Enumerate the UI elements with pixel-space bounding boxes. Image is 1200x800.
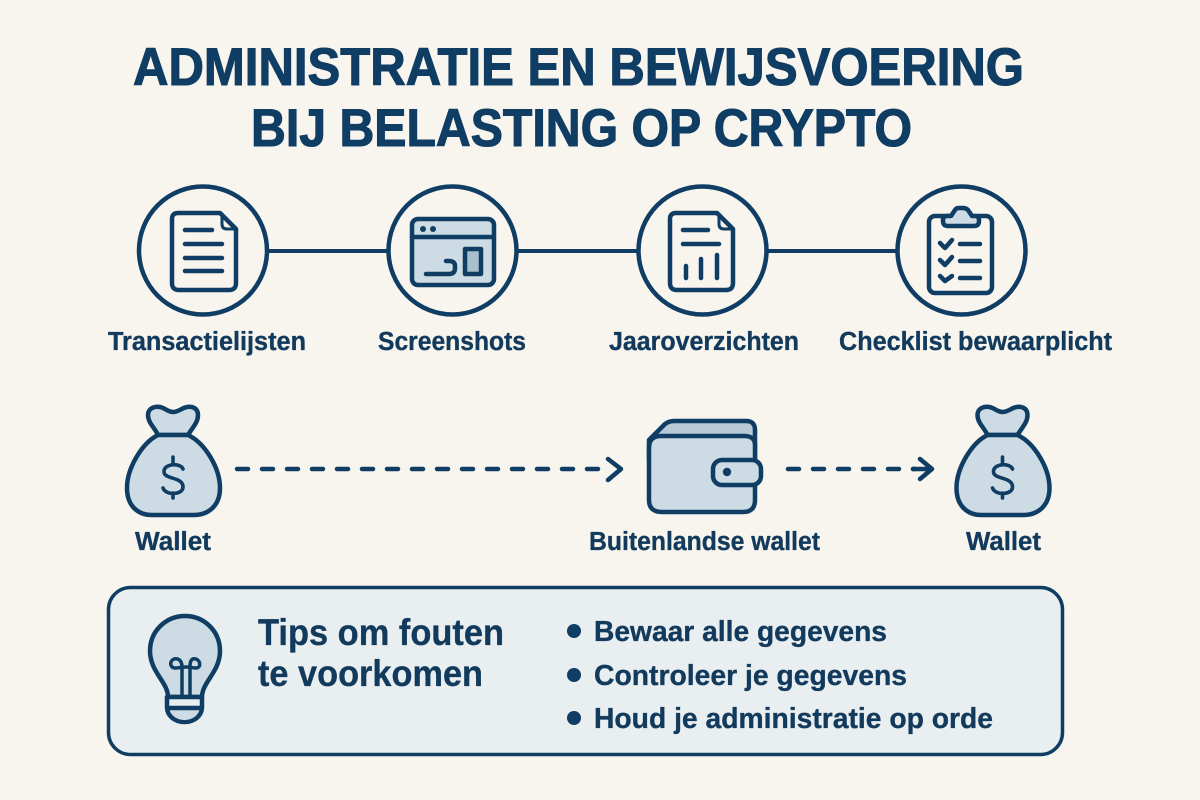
title: BIJ BELASTING OP CRYPTO <box>251 99 912 158</box>
arrow: dashed to foreign wallet <box>237 459 621 480</box>
icon: annual report <box>638 186 766 314</box>
icon: screenshot window <box>388 186 516 314</box>
label: Jaaroverzichten: Jaaroverzichten <box>609 328 799 356</box>
tip list <box>567 616 993 735</box>
icon: wallet <box>649 421 761 512</box>
tip list: Bewaar alle gegevens <box>594 616 887 648</box>
panel: tips <box>108 588 1062 754</box>
icon: money bag right <box>956 407 1050 515</box>
heading: tips: Tips om fouten <box>258 612 504 653</box>
heading: tips <box>258 612 504 694</box>
heading: tips: te voorkomen <box>258 653 483 694</box>
label: Checklist bewaarplicht: Checklist bewaarplicht <box>839 328 1112 356</box>
tip list: Controleer je gegevens <box>594 660 907 692</box>
icon: transaction document <box>139 186 267 314</box>
icon: money bag left <box>127 407 220 515</box>
label: Wallet right: Wallet <box>966 528 1042 556</box>
icon: clipboard checklist <box>898 186 1026 314</box>
label: Wallet left: Wallet <box>135 528 212 556</box>
wallet flow <box>127 407 1050 556</box>
label: Transactielijsten: Transactielijsten <box>108 328 306 356</box>
arrow: dashed to wallet <box>788 459 932 479</box>
tip list: Houd je administratie op orde <box>594 703 993 735</box>
icon: light bulb <box>150 616 220 722</box>
process timeline <box>108 186 1112 356</box>
label: Screenshots: Screenshots <box>378 328 526 356</box>
title <box>133 38 1024 158</box>
title: ADMINISTRATIE EN BEWIJSVOERING <box>133 38 1024 97</box>
label: Buitenlandse wallet: Buitenlandse wallet <box>589 528 820 556</box>
